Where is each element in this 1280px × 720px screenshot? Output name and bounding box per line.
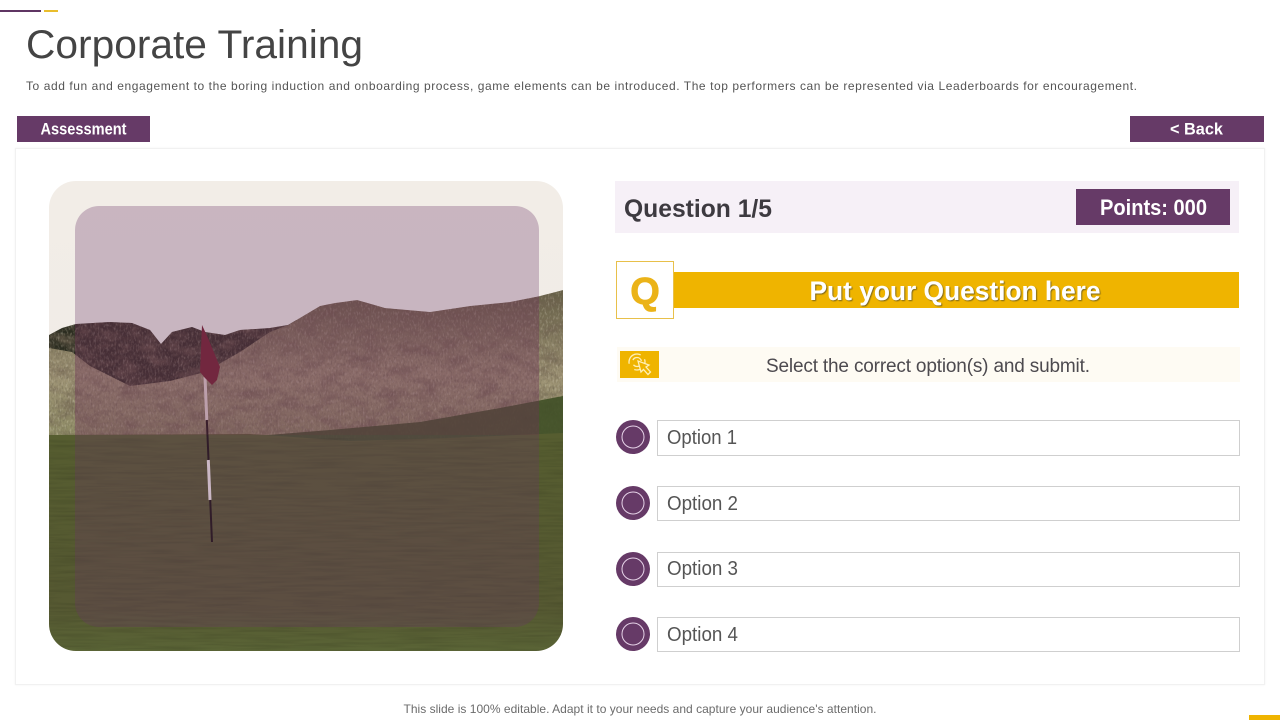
option 2 <box>616 486 1240 520</box>
photo overlay <box>75 206 539 627</box>
flag pole <box>206 420 213 542</box>
grass slope shade <box>266 396 563 441</box>
instruction bar: Select the correct option(s) and submit. <box>766 356 1090 377</box>
option 2: Option 2 <box>667 493 738 515</box>
question header bar: Question 1/5 <box>624 195 772 223</box>
question banner: Q <box>630 271 660 313</box>
tab: Assessment: Assessment <box>40 120 127 138</box>
subtitle text: To add fun and engagement to the boring induction and onboarding process, game elements can be introduced. The top performers can be represented via Leaderboards for encouragement. <box>26 79 1137 93</box>
title: Corporate Training <box>26 23 363 67</box>
option 1: Option 1 <box>667 427 737 449</box>
option 3 <box>616 552 1240 586</box>
putting green <box>49 433 563 651</box>
points badge: Points: 000 <box>1100 195 1207 220</box>
option 3: Option 3 <box>667 558 738 580</box>
option 1 <box>616 420 1240 456</box>
button: Back <box>1130 116 1264 142</box>
question header bar <box>615 181 1239 233</box>
points badge <box>1076 189 1230 225</box>
question banner: Put your Question here <box>810 276 1100 306</box>
footer note: This slide is 100% editable. Adapt it to your needs and capture your audience's attention. <box>404 702 876 716</box>
tab: Assessment <box>17 116 150 142</box>
icon: cursor click <box>620 351 659 378</box>
trees <box>49 320 296 386</box>
option 4 <box>616 617 1240 652</box>
hill tint inside overlay <box>75 290 539 435</box>
photo: golf green with flag <box>49 181 563 651</box>
accent lines: top left <box>0 10 58 12</box>
flag <box>200 325 220 385</box>
question banner <box>616 262 1239 318</box>
panel: quiz card <box>16 148 1264 684</box>
dune hill <box>49 290 563 445</box>
button: Back: < Back <box>1170 120 1224 138</box>
instruction bar <box>617 347 1240 382</box>
accent: bottom right corner <box>1249 715 1280 720</box>
option 4: Option 4 <box>667 624 738 646</box>
